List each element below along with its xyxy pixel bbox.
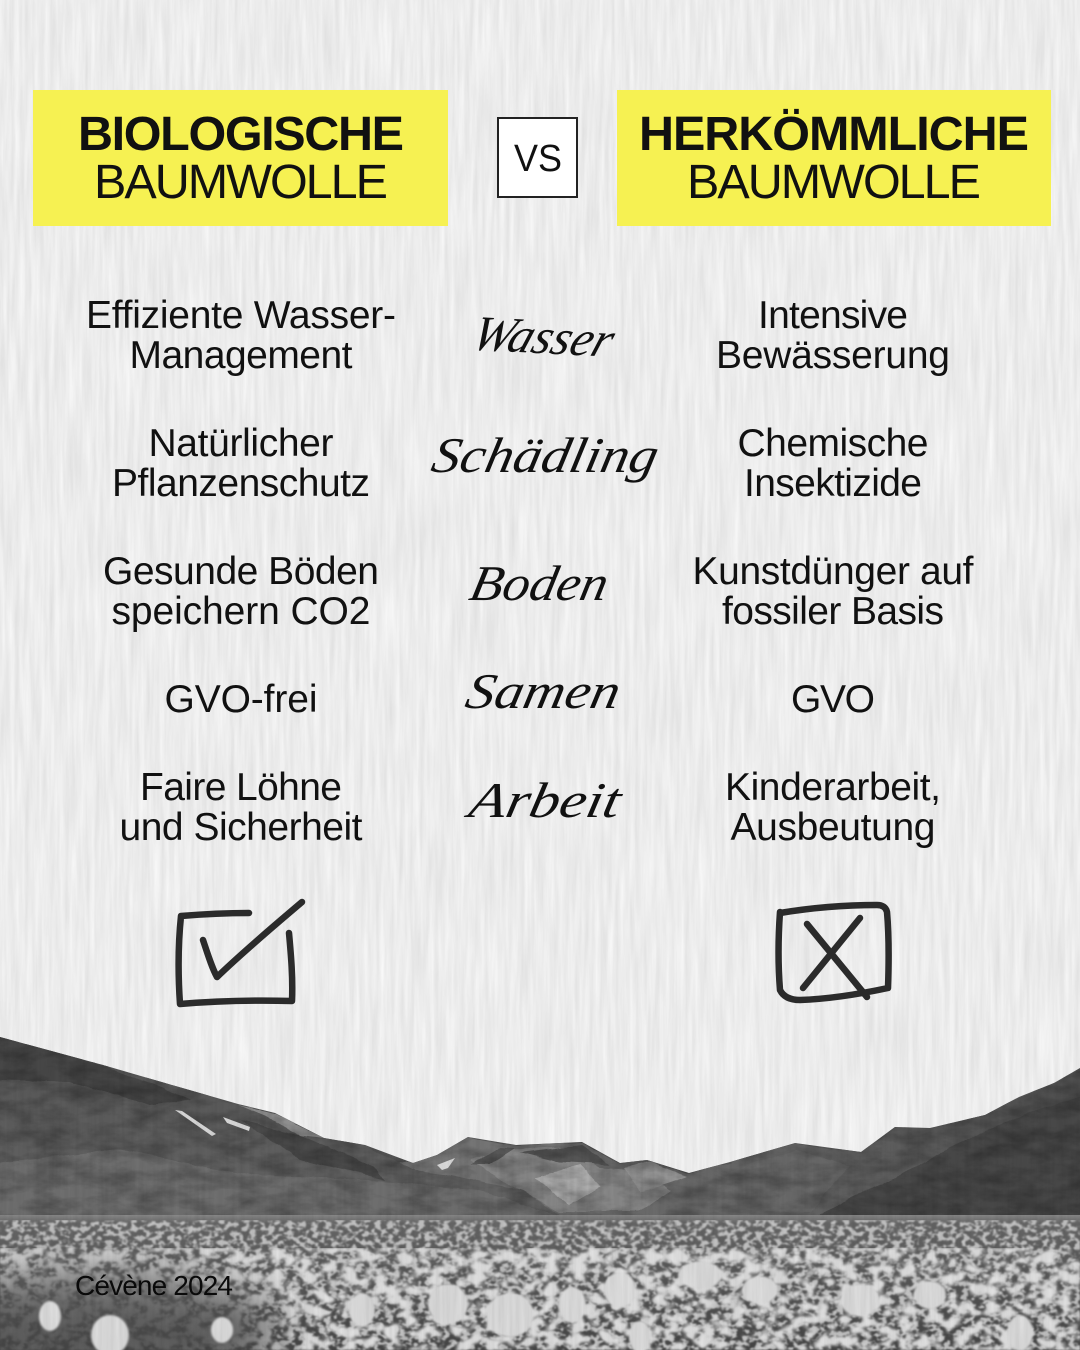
conventional: labour: Kinderarbeit, bbox=[725, 766, 941, 809]
category: Wasser: Wasser bbox=[465, 307, 622, 368]
cotton field bbox=[0, 1215, 1080, 1350]
mountains bbox=[0, 1030, 1080, 1218]
category: Samen: Samen bbox=[461, 663, 626, 719]
organic: pests bbox=[112, 422, 370, 505]
organic: soil: speichern CO2 bbox=[112, 590, 370, 633]
conventional: labour bbox=[725, 766, 941, 849]
VS badge: VS bbox=[514, 138, 562, 180]
left column: organic cotton points bbox=[86, 294, 396, 849]
conventional: water: Bewässerung bbox=[716, 334, 950, 377]
snow patches bbox=[175, 1110, 455, 1170]
left header text: BIOLOGISCHE bbox=[78, 107, 404, 161]
mountain surface mottling bbox=[0, 1030, 1080, 1220]
conventional: water bbox=[716, 294, 950, 377]
landscape photo: mountains and cotton field bbox=[0, 1030, 1080, 1350]
organic: soil bbox=[103, 550, 379, 633]
centre column: script category labels bbox=[427, 307, 664, 828]
category: Boden: Boden bbox=[465, 555, 614, 611]
organic: pests: Natürlicher bbox=[148, 422, 334, 465]
footer credit: Cévène 2024 bbox=[75, 1270, 233, 1301]
category: Arbeit: Arbeit bbox=[461, 772, 629, 828]
mountain silhouette backing bbox=[0, 1037, 1080, 1174]
organic: labour: und Sicherheit bbox=[120, 806, 363, 849]
right header text: BAUMWOLLE bbox=[687, 155, 981, 209]
organic: seeds: GVO-frei bbox=[164, 678, 318, 721]
right header text: HERKÖMMLICHE bbox=[639, 107, 1029, 161]
icon: hand-drawn check box bbox=[179, 902, 302, 1004]
organic: labour: Faire Löhne bbox=[140, 766, 342, 809]
organic: pests: Pflanzenschutz bbox=[112, 462, 370, 505]
organic: soil: Gesunde Böden bbox=[103, 550, 379, 593]
organic: water bbox=[86, 294, 396, 377]
organic: water: Management bbox=[130, 334, 353, 377]
organic: labour bbox=[120, 766, 363, 849]
VS badge bbox=[498, 118, 577, 197]
conventional: pests: Insektizide bbox=[744, 462, 922, 505]
icon: hand-drawn cross box bbox=[778, 905, 889, 1000]
paper texture over landscape bbox=[0, 1070, 1080, 1350]
conventional: pests: Chemische bbox=[738, 422, 928, 465]
right header text bbox=[639, 107, 1029, 209]
left header text: BAUMWOLLE bbox=[94, 155, 388, 209]
conventional: soil: fossiler Basis bbox=[722, 590, 944, 633]
conventional: water: Intensive bbox=[758, 294, 908, 337]
conventional: soil: Kunstdünger auf bbox=[692, 550, 974, 593]
left header panel bbox=[33, 90, 448, 226]
right column: conventional cotton points bbox=[692, 294, 974, 849]
conventional: labour: Ausbeutung bbox=[730, 806, 936, 849]
conventional: soil bbox=[692, 550, 974, 633]
left header text bbox=[78, 107, 404, 209]
organic: water: Effiziente Wasser- bbox=[86, 294, 396, 337]
category: Schädling: Schädling bbox=[427, 427, 664, 483]
foreground cotton tufts bbox=[39, 1261, 1033, 1350]
right header panel bbox=[617, 90, 1051, 226]
conventional: seeds: GVO bbox=[791, 678, 875, 721]
conventional: pests bbox=[738, 422, 928, 505]
